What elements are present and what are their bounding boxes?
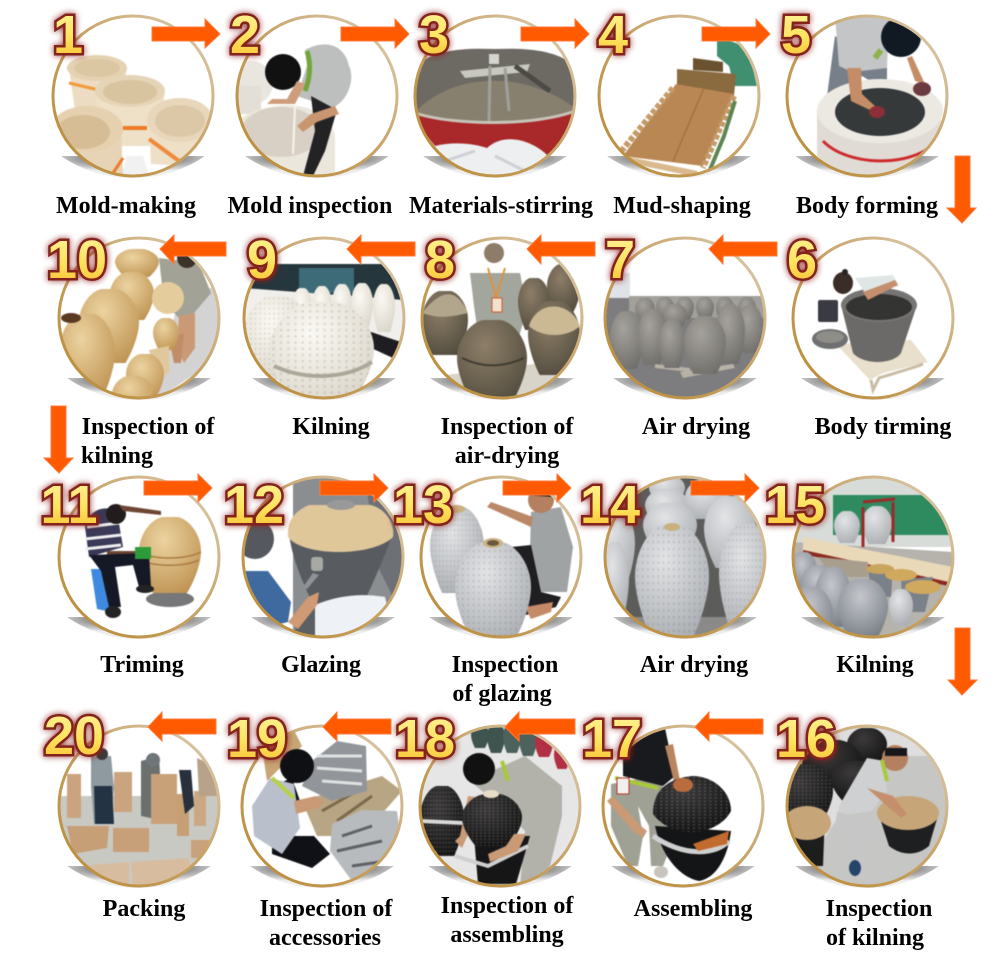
step 17 photo: assembling [603, 726, 763, 888]
step numbers: 13 [393, 475, 453, 535]
step numbers: 19 [227, 709, 287, 769]
step numbers: 4 [598, 5, 628, 65]
step numbers: 5 [781, 5, 811, 65]
step captions: Materials-stirring [409, 193, 593, 219]
step numbers: 6 [787, 230, 817, 290]
step captions: of kilning [826, 925, 924, 951]
step captions: Glazing [281, 652, 361, 678]
scene: worker checking wrapped parts on pallet [252, 726, 402, 886]
step captions: Inspection of [82, 414, 215, 440]
step captions: accessories [269, 925, 381, 951]
scene: inspector crouching beside black bowl [777, 726, 947, 886]
step captions: kilning [81, 443, 153, 469]
scene: worker assembling black kamado [607, 728, 731, 881]
step numbers: 20 [44, 706, 104, 766]
flow arrows between steps [44, 19, 977, 741]
scene: rows of pale dotted jars on dark floor [606, 478, 764, 636]
step 13 photo: inspection of glazing [421, 477, 581, 642]
step captions: Inspection [452, 652, 558, 678]
step captions: Kilning [836, 652, 914, 678]
step numbers: 17 [582, 709, 642, 769]
step 8 photo: inspection of air-drying [422, 238, 582, 404]
step 15 photo: kilning [789, 477, 953, 647]
step 7 photo: air drying [605, 238, 765, 400]
step captions: Inspection of [441, 414, 574, 440]
step numbers: 18 [395, 709, 455, 769]
scene: rows of grey jars on pallets [605, 273, 765, 398]
step captions: Air drying [642, 414, 750, 440]
step 1 photo: mold-making [51, 16, 213, 178]
step numbers: 1 [53, 5, 83, 65]
step captions: Mold inspection [228, 193, 392, 219]
step captions: Inspection of [260, 896, 393, 922]
scene: crouching inspector with grey dotted jars [430, 487, 573, 642]
step numbers: 12 [224, 475, 284, 535]
step captions: assembling [450, 922, 564, 948]
step captions: Mud-shaping [613, 193, 751, 219]
step numbers: 8 [425, 230, 455, 290]
scene: four tan molds with orange straps [51, 55, 213, 176]
scene: worker bending over white mold [229, 44, 351, 176]
step 20 photo: packing [59, 726, 219, 888]
step captions: Inspection [826, 896, 932, 922]
step 14 photo: air drying [595, 475, 775, 639]
step 11 photo: trimming [59, 477, 219, 639]
step numbers: 14 [580, 475, 640, 535]
step numbers: 3 [419, 5, 449, 65]
scene: white dotted jars in kiln hall [244, 264, 404, 406]
step captions: Kilning [292, 414, 370, 440]
step 12 photo: glazing [236, 477, 403, 639]
step numbers: 10 [47, 230, 107, 290]
scene: seated worker sanding tan jar [85, 504, 201, 618]
step 2 photo: mold inspection [229, 16, 397, 178]
step 19 photo: inspection of accessories [242, 726, 402, 888]
scene: red mixer with grey sand and white sacks [415, 49, 575, 176]
scene: inspector fitting bands on black kamados [420, 723, 580, 886]
step numbers: 11 [40, 475, 98, 535]
step captions: Body forming [796, 193, 938, 219]
scene: inspector among dark olive jars [422, 243, 582, 404]
step captions: Inspection of [441, 893, 574, 919]
step 18 photo: inspection of assembling [420, 723, 580, 888]
scene: tan jars with inspector holding lid [60, 248, 218, 396]
step numbers: 7 [605, 230, 635, 290]
step 6 photo: body trimming [793, 238, 953, 400]
step 9 photo: kilning [244, 238, 404, 406]
scene: kiln hall with green wall, red rails and grey jars [794, 478, 952, 636]
step captions: Body tirming [815, 414, 951, 440]
step numbers: 2 [230, 5, 260, 65]
scene: large dark grey pot on pallet [812, 269, 928, 390]
step captions: Air drying [640, 652, 748, 678]
step 10 photo: inspection of kilning [59, 238, 219, 416]
step captions: Mold-making [56, 193, 196, 219]
step numbers [40, 5, 836, 769]
step captions: Packing [103, 896, 185, 922]
step captions: of glazing [452, 681, 552, 707]
step numbers: 15 [765, 475, 825, 535]
step captions [56, 193, 951, 951]
scene: spray-glazing a jar in grey booth [236, 477, 403, 637]
step captions: Assembling [634, 896, 752, 922]
scene: extruder conveyor with brown mud slab [619, 36, 757, 174]
scene: worker forming inside white concrete ring [817, 16, 943, 176]
scene: workers and cardboard boxes [59, 748, 219, 886]
step 3 photo: materials-stirring [415, 16, 575, 178]
step numbers: 9 [247, 230, 277, 290]
step captions: air-drying [455, 443, 559, 469]
step 16 photo: inspection of kilning [777, 726, 947, 888]
step 4 photo: mud-shaping [599, 16, 759, 178]
step numbers: 16 [776, 709, 836, 769]
step 5 photo: body forming [787, 16, 947, 178]
step captions: Triming [100, 652, 184, 678]
